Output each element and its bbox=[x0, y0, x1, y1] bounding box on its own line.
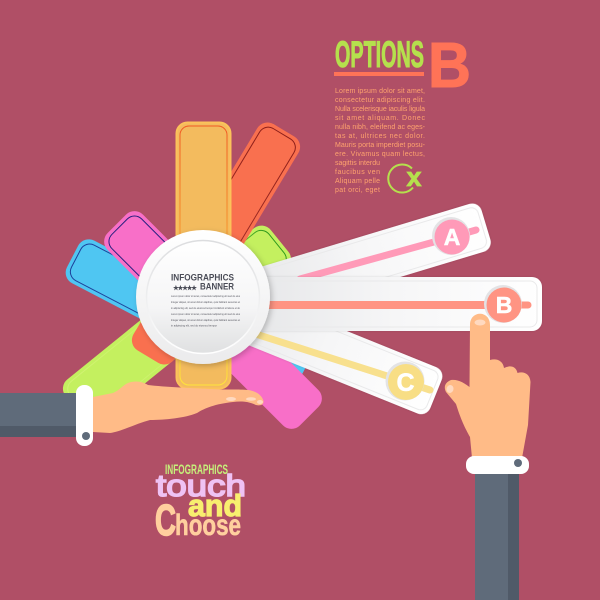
big letter B: B bbox=[428, 29, 471, 101]
banner body text: Integer aliquet, sit amet dictum dapibus, quis habitant senectus et bbox=[171, 300, 240, 304]
stripe A bbox=[300, 230, 476, 279]
badge B: B bbox=[496, 292, 512, 318]
left sleeve bbox=[0, 393, 78, 437]
badge C: C bbox=[396, 369, 415, 397]
touch and choose wordmark: C bbox=[155, 496, 176, 545]
open palm bbox=[93, 382, 264, 433]
touch and choose wordmark: INFOGRAPHICS bbox=[165, 462, 228, 477]
touch and choose wordmark: and bbox=[188, 488, 242, 523]
right cuff bbox=[466, 456, 529, 474]
right hand pointing at option B bbox=[445, 314, 530, 600]
options body text bbox=[335, 88, 426, 194]
options body text: Mauris porta imperdiet posu- bbox=[335, 142, 426, 149]
banner body text: Integer aliquet, sit amet dictum dapibus, quis habitant senectus et bbox=[171, 318, 240, 322]
options body text: nulla nibh, eleifend ac eges- bbox=[335, 124, 426, 131]
badge B bbox=[484, 285, 522, 323]
badge C bbox=[386, 362, 424, 400]
petal: yellow bbox=[176, 122, 230, 388]
options body text: tas at, ultrices nec dolor. bbox=[335, 133, 425, 140]
petal: orange red bbox=[127, 118, 305, 369]
panel: fan of coloured petals bbox=[58, 118, 327, 434]
touch and choose wordmark bbox=[155, 462, 246, 545]
petal: green bbox=[58, 221, 296, 427]
banner body text: in adipiscing elit, sed do eiusmod tempor bbox=[171, 324, 217, 328]
options body text: faucibus ven bbox=[335, 169, 380, 176]
banner body text bbox=[171, 294, 240, 328]
petal: magenta bbox=[99, 206, 327, 434]
fingernails bbox=[445, 320, 486, 394]
left cuff bbox=[76, 385, 93, 446]
right sleeve bbox=[475, 474, 519, 600]
options body text: sit amet aliquam. Donec bbox=[335, 115, 426, 122]
banner heading: INFOGRAPHICS bbox=[171, 272, 234, 282]
options body text: pat orci, eget bbox=[335, 187, 380, 194]
option bar A bbox=[206, 201, 493, 331]
badge A: A bbox=[444, 224, 460, 250]
banner heading bbox=[171, 272, 234, 292]
title underline bbox=[334, 72, 424, 76]
banner heading: BANNER bbox=[200, 282, 234, 292]
options body text: consectetur adipiscing elit. bbox=[335, 97, 425, 104]
banner body text: in adipiscing elit, sed do eiusmod tempor incididunt ut labore et do bbox=[171, 306, 240, 310]
pointing hand bbox=[445, 314, 530, 458]
banner body text: Lorem ipsum dolor sit amet, consectetur adipiscing elit sed do eius bbox=[171, 312, 240, 316]
fingernails bbox=[226, 397, 263, 404]
options body text: ere. Vivamus quam lectus, bbox=[335, 151, 425, 158]
petal: blue bbox=[61, 235, 313, 397]
option bar C bbox=[181, 272, 445, 417]
touch and choose wordmark: touch bbox=[156, 468, 246, 503]
banner heading: ★★★★★ bbox=[173, 284, 198, 292]
badge A bbox=[432, 217, 470, 255]
options body text: Nulla scelerisque iaculis ligula bbox=[335, 106, 425, 113]
options body text: sagittis interdu bbox=[335, 160, 380, 167]
banner body text: Lorem ipsum dolor sit amet, consectetur adipiscing elit sed do eius bbox=[171, 294, 240, 298]
stripe B bbox=[215, 301, 504, 309]
options title bbox=[334, 29, 471, 101]
icon: circled x bbox=[388, 162, 422, 193]
touch and choose wordmark: hoose bbox=[175, 509, 241, 542]
central banner circle bbox=[136, 230, 270, 364]
options title: OPTIONS bbox=[335, 34, 424, 75]
options body text: Aliquam pelle bbox=[335, 178, 380, 185]
options body text: Lorem ipsum dolor sit amet, bbox=[335, 88, 425, 95]
stripe C bbox=[240, 329, 430, 390]
option bar B bbox=[215, 277, 542, 331]
icon: circled x: x bbox=[406, 162, 422, 192]
left hand holding the fan bbox=[0, 382, 264, 446]
